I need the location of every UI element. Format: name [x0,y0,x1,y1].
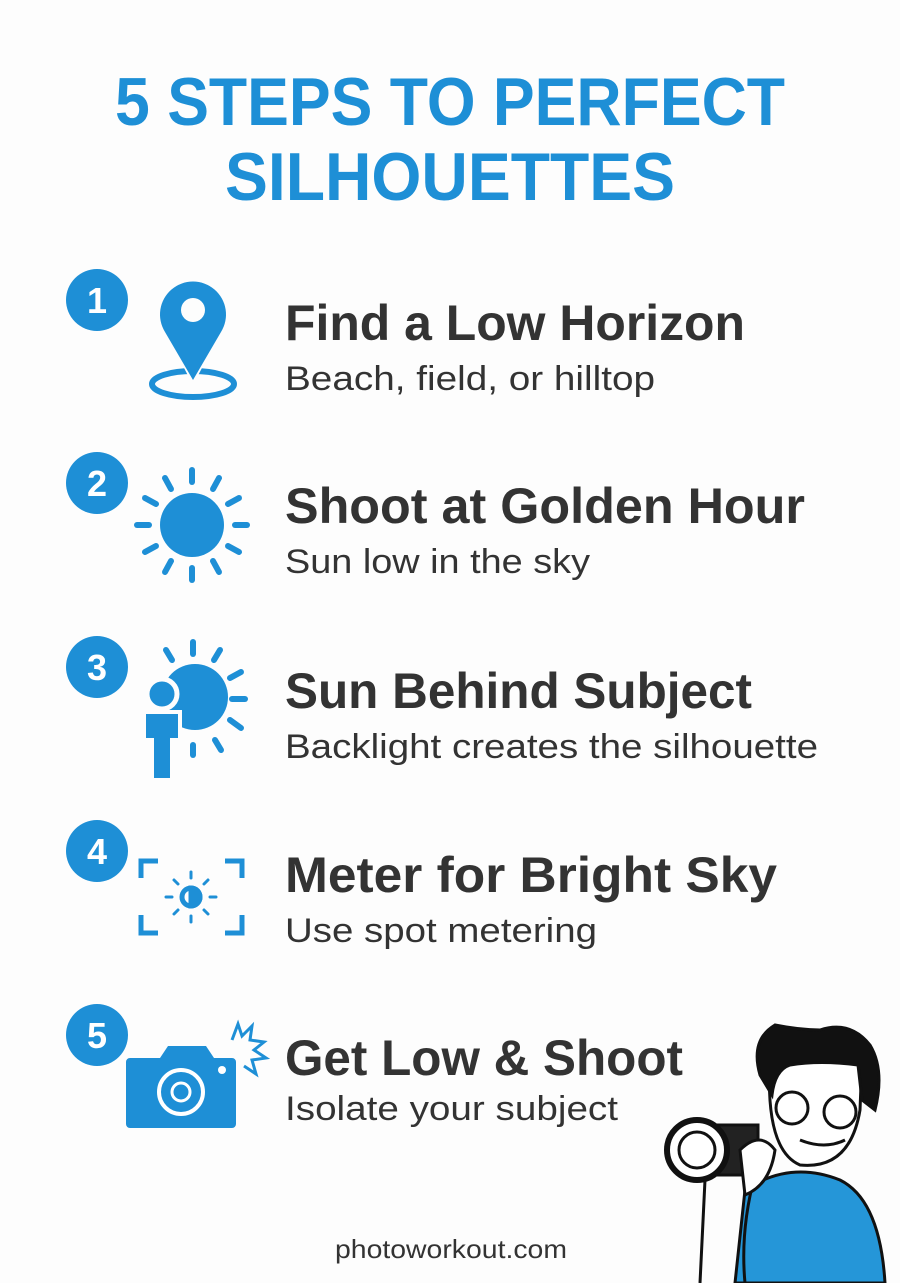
number badge 5: 5 [87,1015,107,1056]
subtitle 5: Isolate your subject [285,1090,619,1128]
step 4 [66,820,777,950]
footer: website: photoworkout.com [335,1234,567,1264]
subtitle 4: Use spot metering [285,912,597,950]
title [115,64,785,215]
number badge 1: 1 [87,280,107,321]
title: SILHOUETTES [225,139,675,215]
number badge 2 [66,452,128,514]
heading 2: Shoot at Golden Hour [285,478,805,534]
icon: sun [137,470,247,580]
icon: person with sun behind [144,642,245,780]
icon: spot metering frame [141,861,242,933]
subtitle 1: Beach, field, or hilltop [285,360,655,398]
heading 4: Meter for Bright Sky [285,847,777,903]
heading 3: Sun Behind Subject [285,663,752,719]
step 1 [66,269,745,398]
number badge 3 [66,636,128,698]
step 2 [66,452,805,581]
number badge 3: 3 [87,647,107,688]
illustration: cartoon photographer [667,1025,885,1283]
subtitle 3: Backlight creates the silhouette [285,728,818,766]
number badge 4 [66,820,128,882]
title: 5 STEPS TO PERFECT [115,64,785,140]
heading 5: Get Low & Shoot [285,1030,683,1086]
heading 1: Find a Low Horizon [285,295,745,351]
icon: location pin [152,275,234,397]
subtitle 2: Sun low in the sky [285,543,590,581]
number badge 4: 4 [87,831,107,872]
icon: camera with flash [126,1024,266,1128]
step 3 [66,636,818,780]
number badge 2: 2 [87,463,107,504]
number badge 1 [66,269,128,331]
number badge 5 [66,1004,128,1066]
step 5 [66,1004,683,1128]
